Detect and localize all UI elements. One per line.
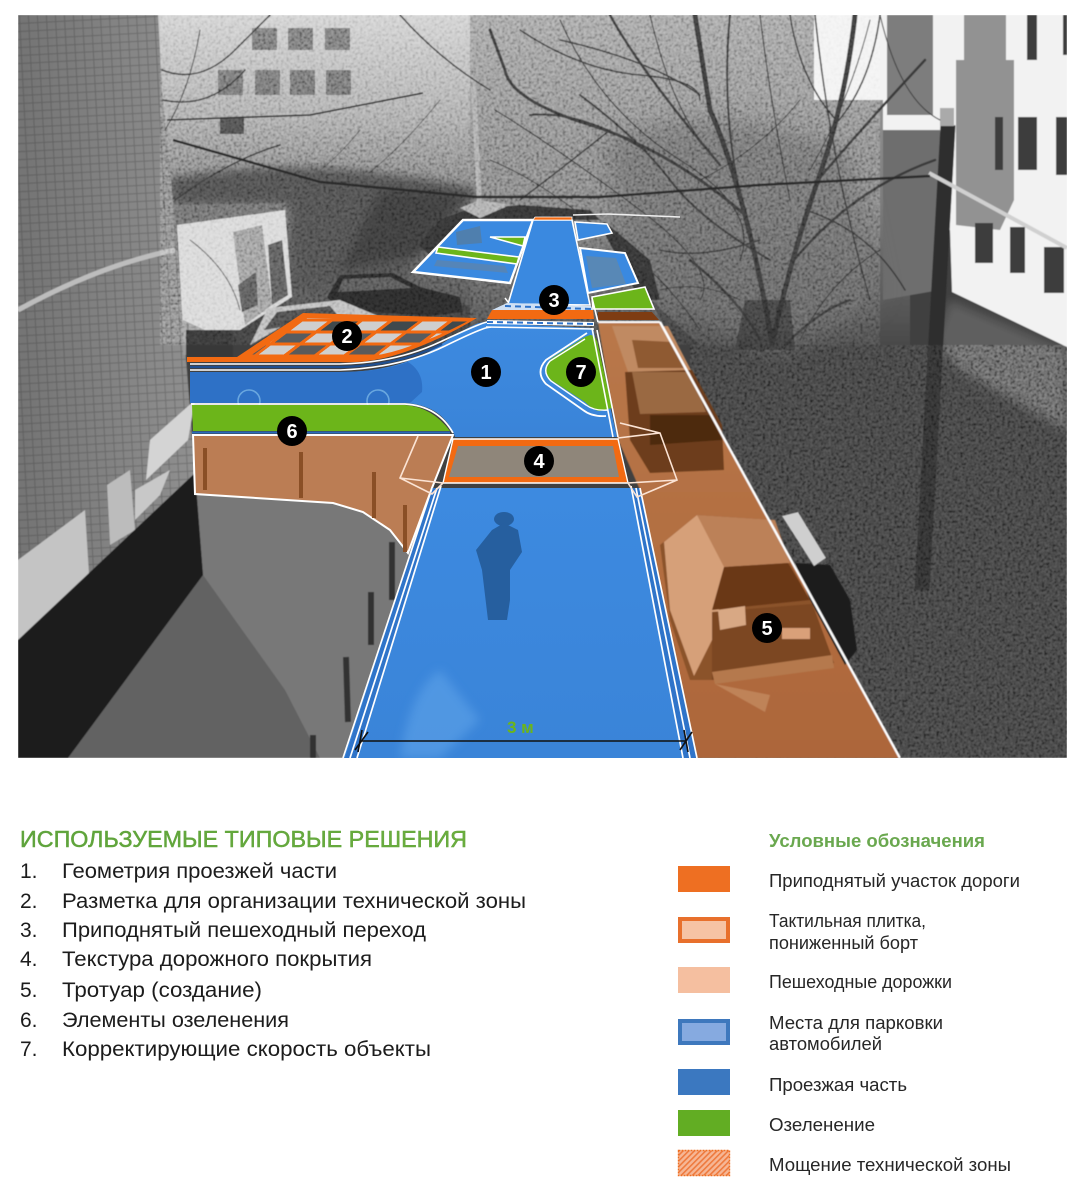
list: typical solutions: Элементы озеленения xyxy=(62,1009,289,1032)
right tree mass shading xyxy=(600,117,880,350)
legend item: tactile paving: пониженный борт xyxy=(769,933,918,953)
legend item: tactile paving xyxy=(680,911,926,953)
list: typical solutions: 5. xyxy=(20,979,38,1002)
overlay: dark brown raised strip xyxy=(598,312,659,320)
photo: street scene with overlay xyxy=(18,15,1067,758)
list: typical solutions: Тротуар (создание) xyxy=(62,979,262,1002)
background: far buildings, trees, ground xyxy=(18,15,1067,758)
overlay: traffic calming island, marker 7 xyxy=(540,333,612,416)
legend item: raised road section: Приподнятый участок дороги xyxy=(769,871,1020,891)
marker 2 xyxy=(332,321,362,351)
trunks and branches xyxy=(162,15,940,345)
overlay: raised tech zone marking, marker 2 xyxy=(187,313,490,370)
left building xyxy=(18,15,194,573)
car: black suv behind xyxy=(795,563,857,665)
overlay: upper road segment xyxy=(508,220,590,305)
list: typical solutions: 2. xyxy=(20,890,38,913)
overlay: left parking block xyxy=(413,220,533,283)
legend item: parking: автомобилей xyxy=(769,1034,882,1054)
asphalt xyxy=(196,495,416,758)
grain xyxy=(160,15,880,345)
list: typical solutions xyxy=(20,860,526,1061)
dark shrub mass xyxy=(165,167,480,290)
right ground xyxy=(652,303,910,360)
overhead wires xyxy=(167,93,930,197)
list: typical solutions: Текстура дорожного покрытия xyxy=(62,948,372,971)
legend item: greenery: Озеленение xyxy=(769,1115,875,1135)
car: suv near top xyxy=(612,326,692,372)
outer white edge of sidewalk xyxy=(660,322,900,758)
legend item: greenery xyxy=(678,1110,875,1136)
legend item: footpaths: Пешеходные дорожки xyxy=(769,972,952,992)
list: typical solutions: 7. xyxy=(20,1038,38,1061)
far cars xyxy=(418,205,600,255)
overlay: left curb ramp outline xyxy=(400,436,443,494)
tree trunk base xyxy=(735,300,795,350)
overlay: green patch top right xyxy=(592,287,654,309)
wall bottom black band xyxy=(18,473,203,758)
legend item: technical zone paving xyxy=(678,1150,1011,1176)
marker 3: 3 xyxy=(548,290,560,312)
overlay: left sidewalk xyxy=(193,435,453,553)
legend item: raised road section xyxy=(678,866,1020,892)
car at far left xyxy=(183,320,207,355)
overlay: right sidewalk with cars xyxy=(598,322,900,758)
overlay: junction carriageway, marker 1 zone xyxy=(190,322,617,437)
legend item: tactile paving: Тактильная плитка, xyxy=(769,911,926,931)
marker 5: 5 xyxy=(761,618,773,640)
car: suv middle xyxy=(625,370,724,473)
legend item: parking xyxy=(680,1013,943,1054)
overlay: right curb ramp outline xyxy=(618,423,677,497)
pole xyxy=(922,125,948,590)
overlay: top right parking xyxy=(575,222,612,240)
legend item: footpaths xyxy=(678,967,952,993)
overlay: raised crossing, marker 3 xyxy=(486,298,594,329)
list: typical solutions: 3. xyxy=(20,919,38,942)
dark parked car xyxy=(327,273,463,316)
legend item: carriageway: Проезжая часть xyxy=(769,1075,907,1095)
marker 3 xyxy=(539,285,569,315)
marker 4 xyxy=(524,446,554,476)
overlay: top orange strip xyxy=(533,217,572,220)
marker 1 xyxy=(471,357,501,387)
marker 2: 2 xyxy=(341,326,353,348)
overlay: top outline line xyxy=(573,214,680,217)
list: typical solutions: Геометрия проезжей части xyxy=(62,860,337,883)
list: typical solutions: 4. xyxy=(20,948,38,971)
dimension: 3 m xyxy=(355,718,692,752)
heading: typical solutions: ИСПОЛЬЗУЕМЫЕ ТИПОВЫЕ РЕШЕНИЯ xyxy=(20,826,467,852)
legend xyxy=(678,866,1020,1176)
right white building xyxy=(814,15,1067,347)
legend item: technical zone paving: Мощение технической зоны xyxy=(769,1155,1011,1175)
overlay: right parking xyxy=(580,248,638,293)
heading: legend: Условные обозначения xyxy=(769,831,985,851)
list: typical solutions: 6. xyxy=(20,1009,38,1032)
list: typical solutions: Корректирующие скорость объекты xyxy=(62,1038,431,1061)
overlay: textured crossing, marker 4 xyxy=(443,439,628,483)
overlay: green bed, marker 6 xyxy=(191,404,453,435)
marker 1: 1 xyxy=(480,362,492,384)
marker 6 xyxy=(277,416,307,446)
small white building xyxy=(178,203,287,220)
legend item: carriageway xyxy=(678,1069,907,1095)
silver car xyxy=(250,300,378,345)
pale lamp post xyxy=(473,75,480,215)
list: typical solutions: Приподнятый пешеходный переход xyxy=(62,919,426,942)
overlay: road right edge lines xyxy=(592,298,618,437)
bollards xyxy=(313,542,392,758)
marker 7 xyxy=(566,357,596,387)
person xyxy=(476,512,522,620)
marker 4: 4 xyxy=(533,451,545,473)
marker 5 xyxy=(752,613,782,643)
parked car in band xyxy=(190,362,422,403)
legend item: parking: Места для парковки xyxy=(769,1013,943,1033)
list: typical solutions: Разметка для организации технической зоны xyxy=(62,890,526,913)
far building windows xyxy=(218,28,351,134)
list: typical solutions: 1. xyxy=(20,860,38,883)
car: brown suv, marker 5 xyxy=(660,542,826,680)
overlay: main road, with pedestrian xyxy=(343,486,697,758)
marker 7: 7 xyxy=(575,362,587,384)
marker 6: 6 xyxy=(286,421,298,443)
dimension: 3 m: 3 м xyxy=(507,718,534,737)
